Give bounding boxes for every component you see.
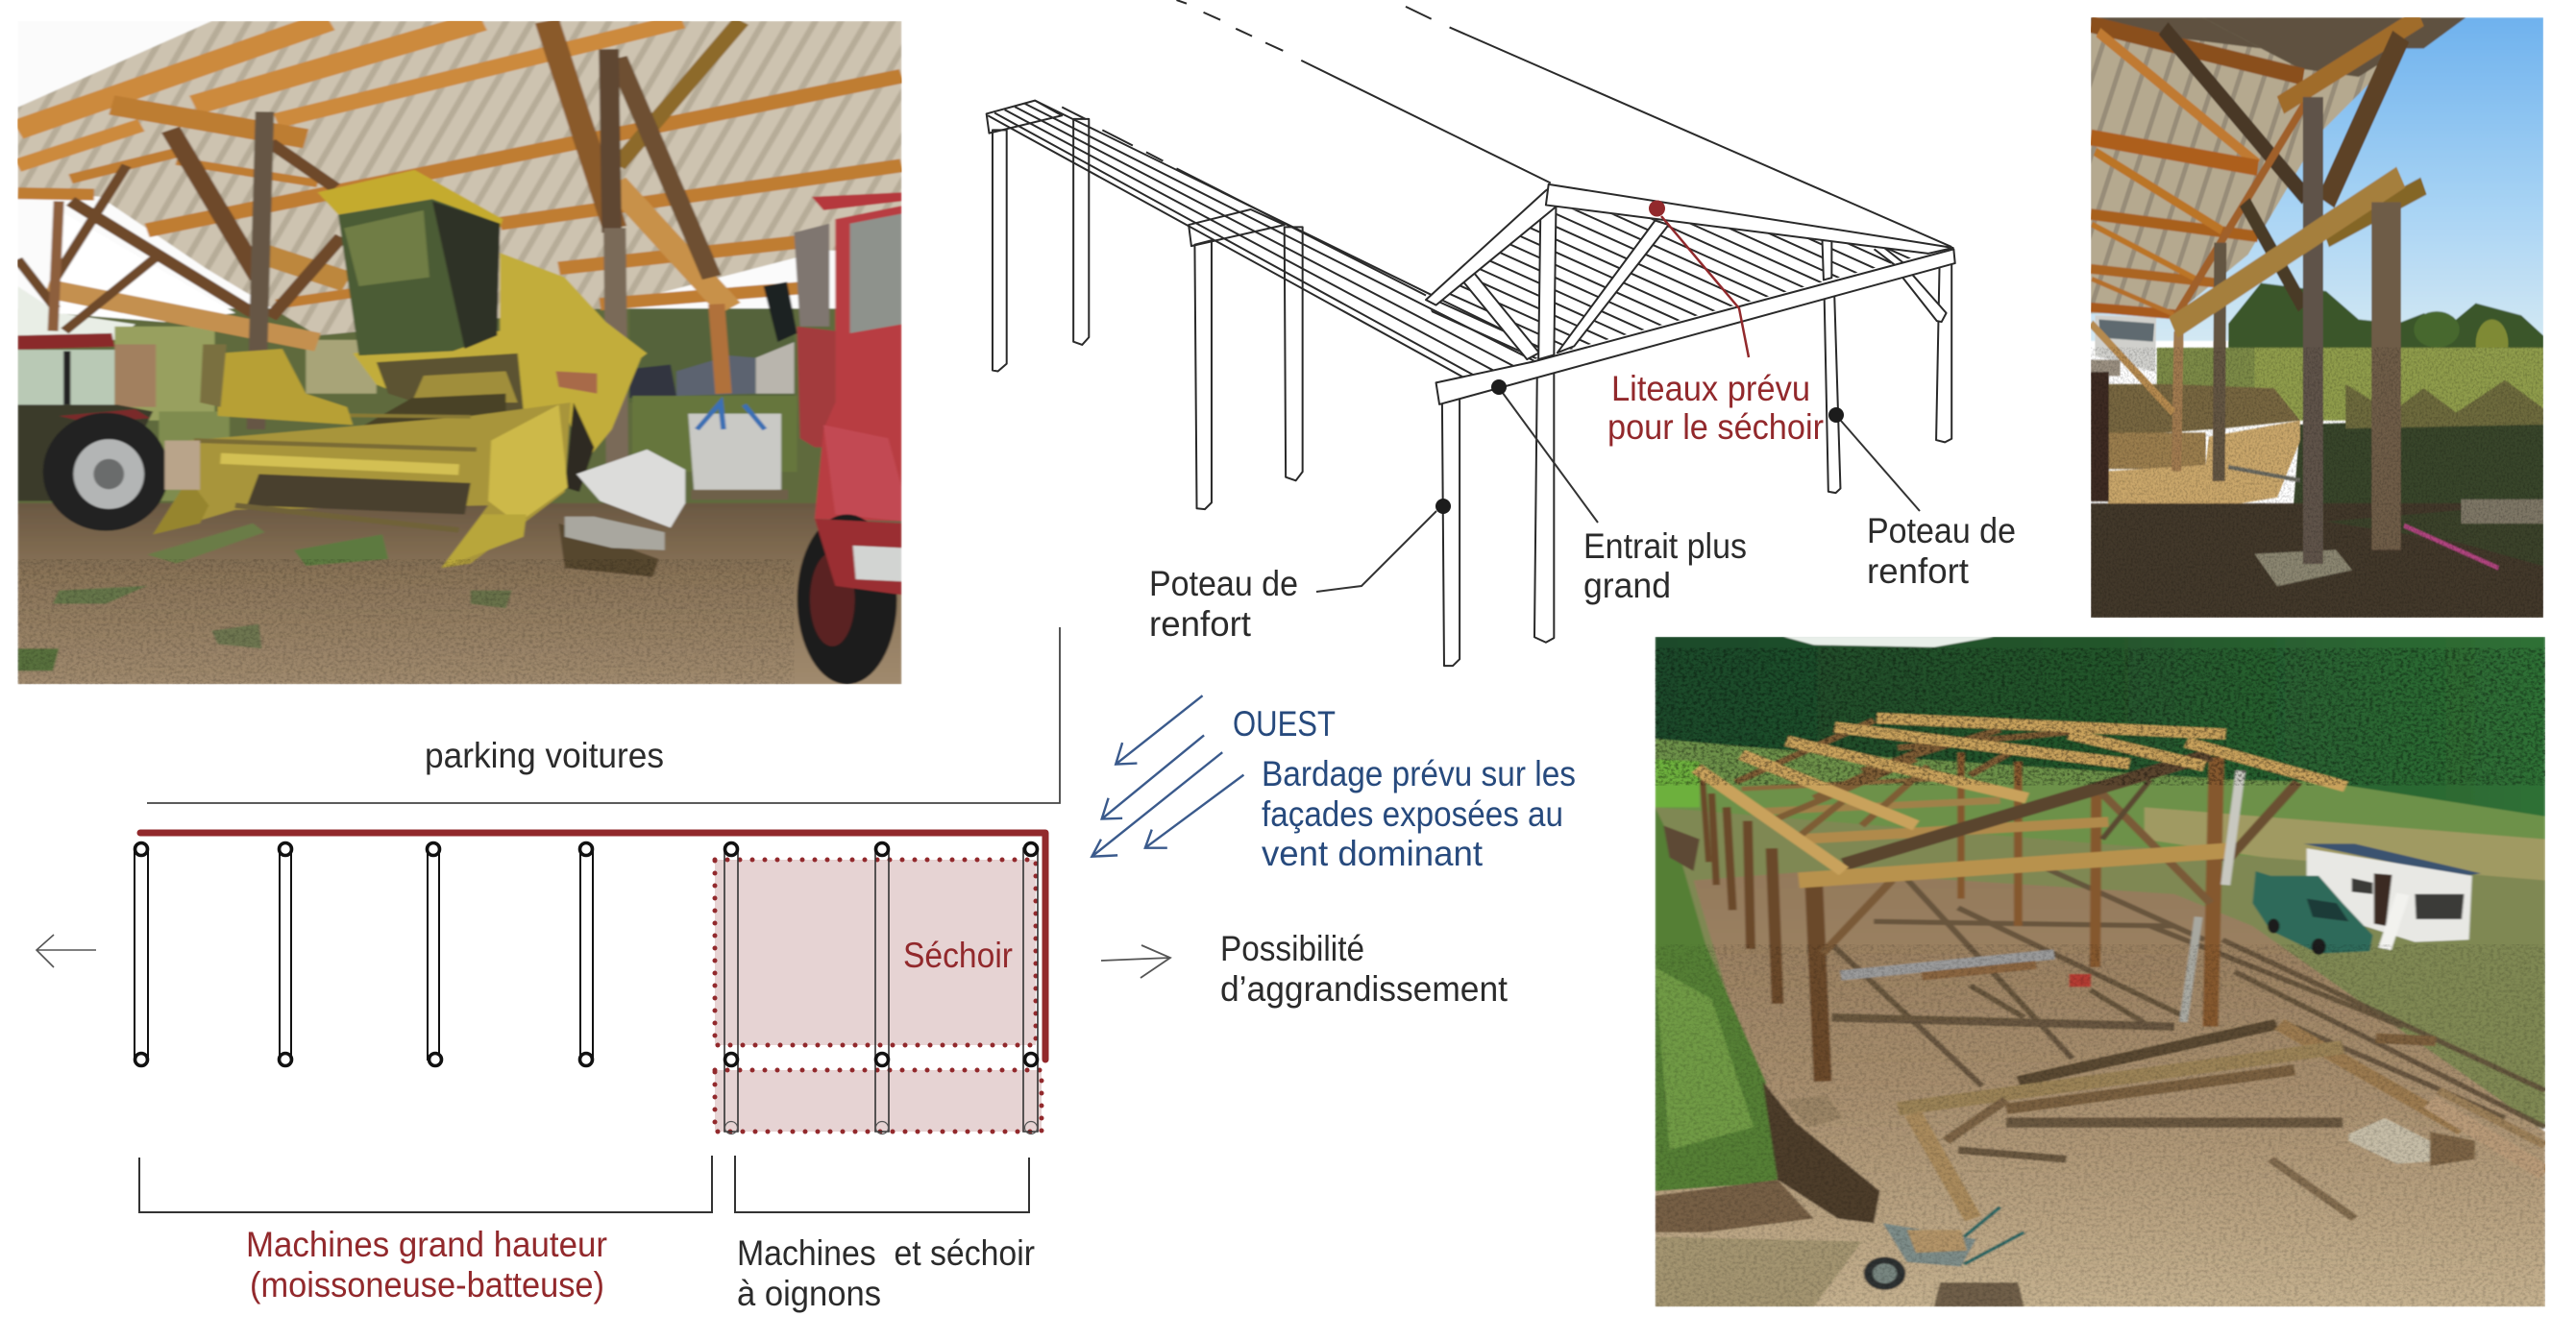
label: machines grand hauteur: Machines grand hauteur (246, 1225, 607, 1264)
label: liteaux (1607, 369, 1824, 447)
arrow: left extension (37, 935, 96, 967)
purlins / rails (987, 101, 1554, 377)
label: machines grand hauteur: (moissoneuse-batteuse) (250, 1265, 604, 1304)
roof ridge lines (1176, 0, 1951, 247)
label: poteau de renfort right: Poteau de (1867, 511, 2016, 550)
wheelbarrow (1864, 1207, 2024, 1306)
label: parking voitures: parking voitures (425, 736, 664, 775)
label: machines grand hauteur (246, 1225, 607, 1304)
plan: west wall cladding (140, 833, 1045, 1060)
label: bardage: façades exposées au (1262, 794, 1563, 834)
label: poteau de renfort right (1867, 511, 2016, 591)
label: machines et séchoir: Machines et séchoir (737, 1233, 1035, 1273)
photo: timber frame under construction (1656, 637, 2545, 1306)
label: bardage: vent dominant (1262, 834, 1484, 873)
tie beam (1436, 249, 1955, 404)
parking boundary line (147, 627, 1060, 803)
bracket: large machines (139, 1156, 712, 1212)
arrow: extension possibility (1101, 945, 1170, 978)
red truck (764, 192, 902, 684)
label: machines et séchoir: à oignons (737, 1274, 881, 1313)
label: poteau de renfort left: Poteau de (1149, 564, 1298, 603)
label: possibilité d'aggrandissement (1220, 929, 1509, 1009)
label: entrait plus grand: grand (1583, 566, 1671, 605)
label: séchoir: Séchoir (903, 936, 1013, 975)
label: possibilité d'aggrandissement: d’aggrandissement (1220, 969, 1509, 1009)
caravan (2304, 843, 2481, 949)
truss members (1426, 184, 1953, 359)
big bags (565, 402, 788, 550)
label: possibilité d'aggrandissement: Possibilité (1220, 929, 1364, 968)
green van (2252, 871, 2372, 955)
label: entrait plus grand (1583, 526, 1747, 605)
label: bardage: Bardage prévu sur les (1262, 754, 1576, 793)
bracket: machines and dryer (735, 1156, 1029, 1212)
plan: trusses and posts (135, 843, 1038, 1134)
tractor (17, 333, 200, 531)
laths for the dryer (1365, 0, 1972, 555)
label: poteau de renfort left (1149, 564, 1298, 644)
label: bardage (1262, 754, 1576, 873)
label: poteau de renfort left: renfort (1149, 604, 1252, 644)
line drawing: isometric timber frame (987, 0, 1972, 666)
label: poteau de renfort right: renfort (1867, 551, 1970, 591)
leader lines with dots (1316, 200, 1920, 592)
label: entrait plus grand: Entrait plus (1583, 526, 1747, 566)
label: machines et séchoir (737, 1233, 1035, 1313)
photo: barn posts and open sky (2091, 17, 2543, 618)
label: liteaux: pour le séchoir (1607, 407, 1824, 447)
label: liteaux: Liteaux prévu (1611, 369, 1810, 408)
white truck (2091, 315, 2156, 501)
plan: séchoir zones (715, 860, 1042, 1132)
arrows: west wind (1092, 695, 1243, 857)
combine harvester body (153, 170, 647, 568)
near-side posts and brace (1442, 262, 1951, 666)
label: ouest: OUEST (1233, 704, 1336, 744)
photo: combine harvester under the barn (17, 21, 902, 684)
far-side posts (993, 119, 1303, 509)
